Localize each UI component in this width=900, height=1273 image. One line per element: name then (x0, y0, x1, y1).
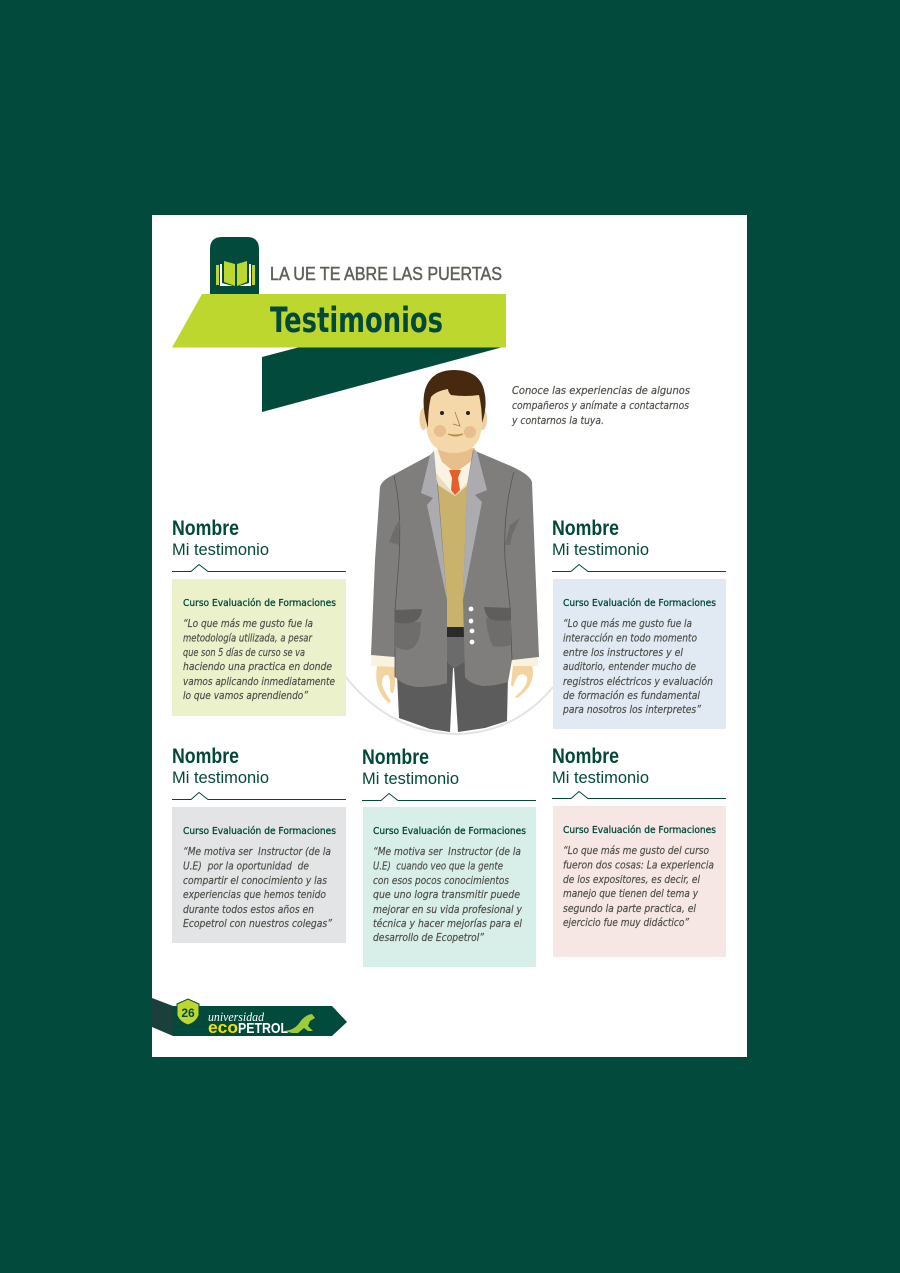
testimonial: top right: auditorio, entender mucho de (563, 661, 696, 673)
testimonial: top right: entre los instructores y el (563, 647, 683, 659)
footer fold (152, 998, 173, 1036)
title: Testimonios (270, 301, 443, 341)
illustration: man in suit (371, 370, 539, 732)
testimonial: top left: metodología utilizada, a pesar (183, 632, 313, 644)
testimonial: bottom centre: Mi testimonio (362, 770, 459, 788)
logo text: universidad (208, 1009, 264, 1024)
testimonial: top left: que son 5 días de curso se va (183, 647, 305, 659)
testimonial: top left: lo que vamos aprendiendo” (183, 690, 308, 702)
icon: open book tab (210, 237, 259, 294)
intro text: compañeros y anímate a contactarnos (512, 400, 689, 412)
testimonial: bottom right: “Lo que más me gusto del curso (563, 845, 709, 857)
testimonial: top left: vamos aplicando inmediatamente (183, 676, 335, 688)
testimonial: top right: Nombre (552, 517, 619, 540)
footer band (173, 1006, 347, 1036)
testimonial: bottom centre: Nombre (362, 746, 429, 769)
testimonial: bottom centre: Curso Evaluación de Formaciones (373, 825, 526, 837)
testimonial: top left (172, 517, 346, 716)
circle arc behind person (345, 676, 553, 734)
dark ribbon fold (262, 347, 503, 412)
testimonial: bottom right: manejo que tienen del tema y (563, 888, 699, 900)
icon: iguana (284, 1014, 315, 1033)
testimonial: top left: Curso Evaluación de Formaciones (183, 597, 336, 609)
testimonial: top right (552, 517, 726, 729)
testimonial: bottom centre: que uno logra transmitir puede (373, 889, 520, 901)
testimonial: bottom left: U.E) por la oportunidad de (183, 860, 309, 872)
vest (438, 485, 468, 628)
testimonial: bottom left (172, 745, 346, 943)
testimonial: top right: para nosotros los interpretes” (562, 704, 701, 716)
belt (447, 627, 464, 637)
page number shield (177, 999, 199, 1025)
testimonial: bottom left: durante todos estos años en (183, 904, 314, 916)
testimonial: bottom right: Curso Evaluación de Formaciones (563, 824, 716, 836)
testimonial: bottom centre: desarrollo de Ecopetrol” (373, 932, 484, 944)
header banner (172, 237, 506, 412)
testimonial: bottom centre: técnica y hacer mejorías para el (373, 918, 522, 930)
testimonial: bottom centre (362, 746, 536, 967)
testimonial: bottom left: Mi testimonio (172, 769, 269, 787)
jacket (371, 450, 539, 687)
head (420, 370, 487, 453)
testimonial: top right: Curso Evaluación de Formaciones (563, 597, 716, 609)
hair (424, 370, 486, 428)
necktie (449, 470, 461, 495)
testimonial: bottom right (552, 745, 726, 957)
intro text (511, 385, 690, 427)
testimonial: bottom left: Curso Evaluación de Formaciones (183, 825, 336, 837)
intro text: Conoce las experiencias de algunos (512, 385, 690, 397)
testimonial: top right: de formación es fundamental (563, 690, 700, 702)
white page panel (152, 215, 747, 1057)
testimonial: top right: “Lo que más me gusto fue la (563, 618, 692, 630)
lapels (421, 449, 487, 600)
page number shield: 26 (181, 1006, 195, 1020)
testimonial: bottom centre: “Me motiva ser Instructor (de la (373, 846, 521, 858)
testimonial: bottom right: fueron dos cosas: La experiencia (563, 860, 714, 872)
testimonial: top left: Mi testimonio (172, 541, 269, 559)
testimonial: bottom right: Mi testimonio (552, 769, 649, 787)
testimonial: bottom left: experiencias que hemos tenido (183, 889, 326, 901)
kicker heading: LA UE TE ABRE LAS PUERTAS (270, 264, 502, 284)
shirt cuffs (371, 655, 538, 667)
logo text (208, 1009, 288, 1037)
trousers (397, 637, 508, 732)
testimonial: bottom centre: mejorar en su vida profesional y (373, 904, 523, 916)
testimonial: top right: Mi testimonio (552, 541, 649, 559)
jacket buttons (469, 607, 474, 644)
testimonial: bottom right: de los expositores, es decir, el (563, 874, 700, 886)
testimonial: top left: Nombre (172, 517, 239, 540)
testimonial: bottom left: Ecopetrol con nuestros colegas” (183, 918, 332, 930)
hands (376, 665, 533, 703)
testimonial: bottom right: Nombre (552, 745, 619, 768)
logo text: eco (208, 1018, 238, 1037)
testimonial: bottom left: “Me motiva ser Instructor (de la (183, 846, 331, 858)
testimonial: bottom left: Nombre (172, 745, 239, 768)
testimonial: bottom centre: U.E) cuando veo que la gente (373, 860, 503, 872)
footer badge and logo (152, 998, 347, 1037)
pockets (395, 607, 511, 650)
testimonial: top left: haciendo una practica en donde (183, 661, 332, 673)
testimonial: top left: “Lo que más me gusto fue la (183, 618, 313, 630)
testimonial: bottom right: segundo la parte practica, el (563, 903, 696, 915)
intro text: y contarnos la tuya. (511, 415, 604, 427)
logo text: PETROL (238, 1020, 288, 1037)
testimonial: bottom centre: con esos pocos conocimientos (373, 875, 509, 887)
testimonial: top right: registros eléctricos y evaluación (563, 676, 713, 688)
shirt and neck (434, 448, 477, 500)
testimonial: bottom right: ejercicio fue muy didáctico” (563, 917, 689, 929)
testimonial: bottom left: compartir el conocimiento y las (183, 875, 327, 887)
testimonial: top right: interacción en todo momento (563, 632, 697, 644)
green ribbon (172, 294, 506, 348)
